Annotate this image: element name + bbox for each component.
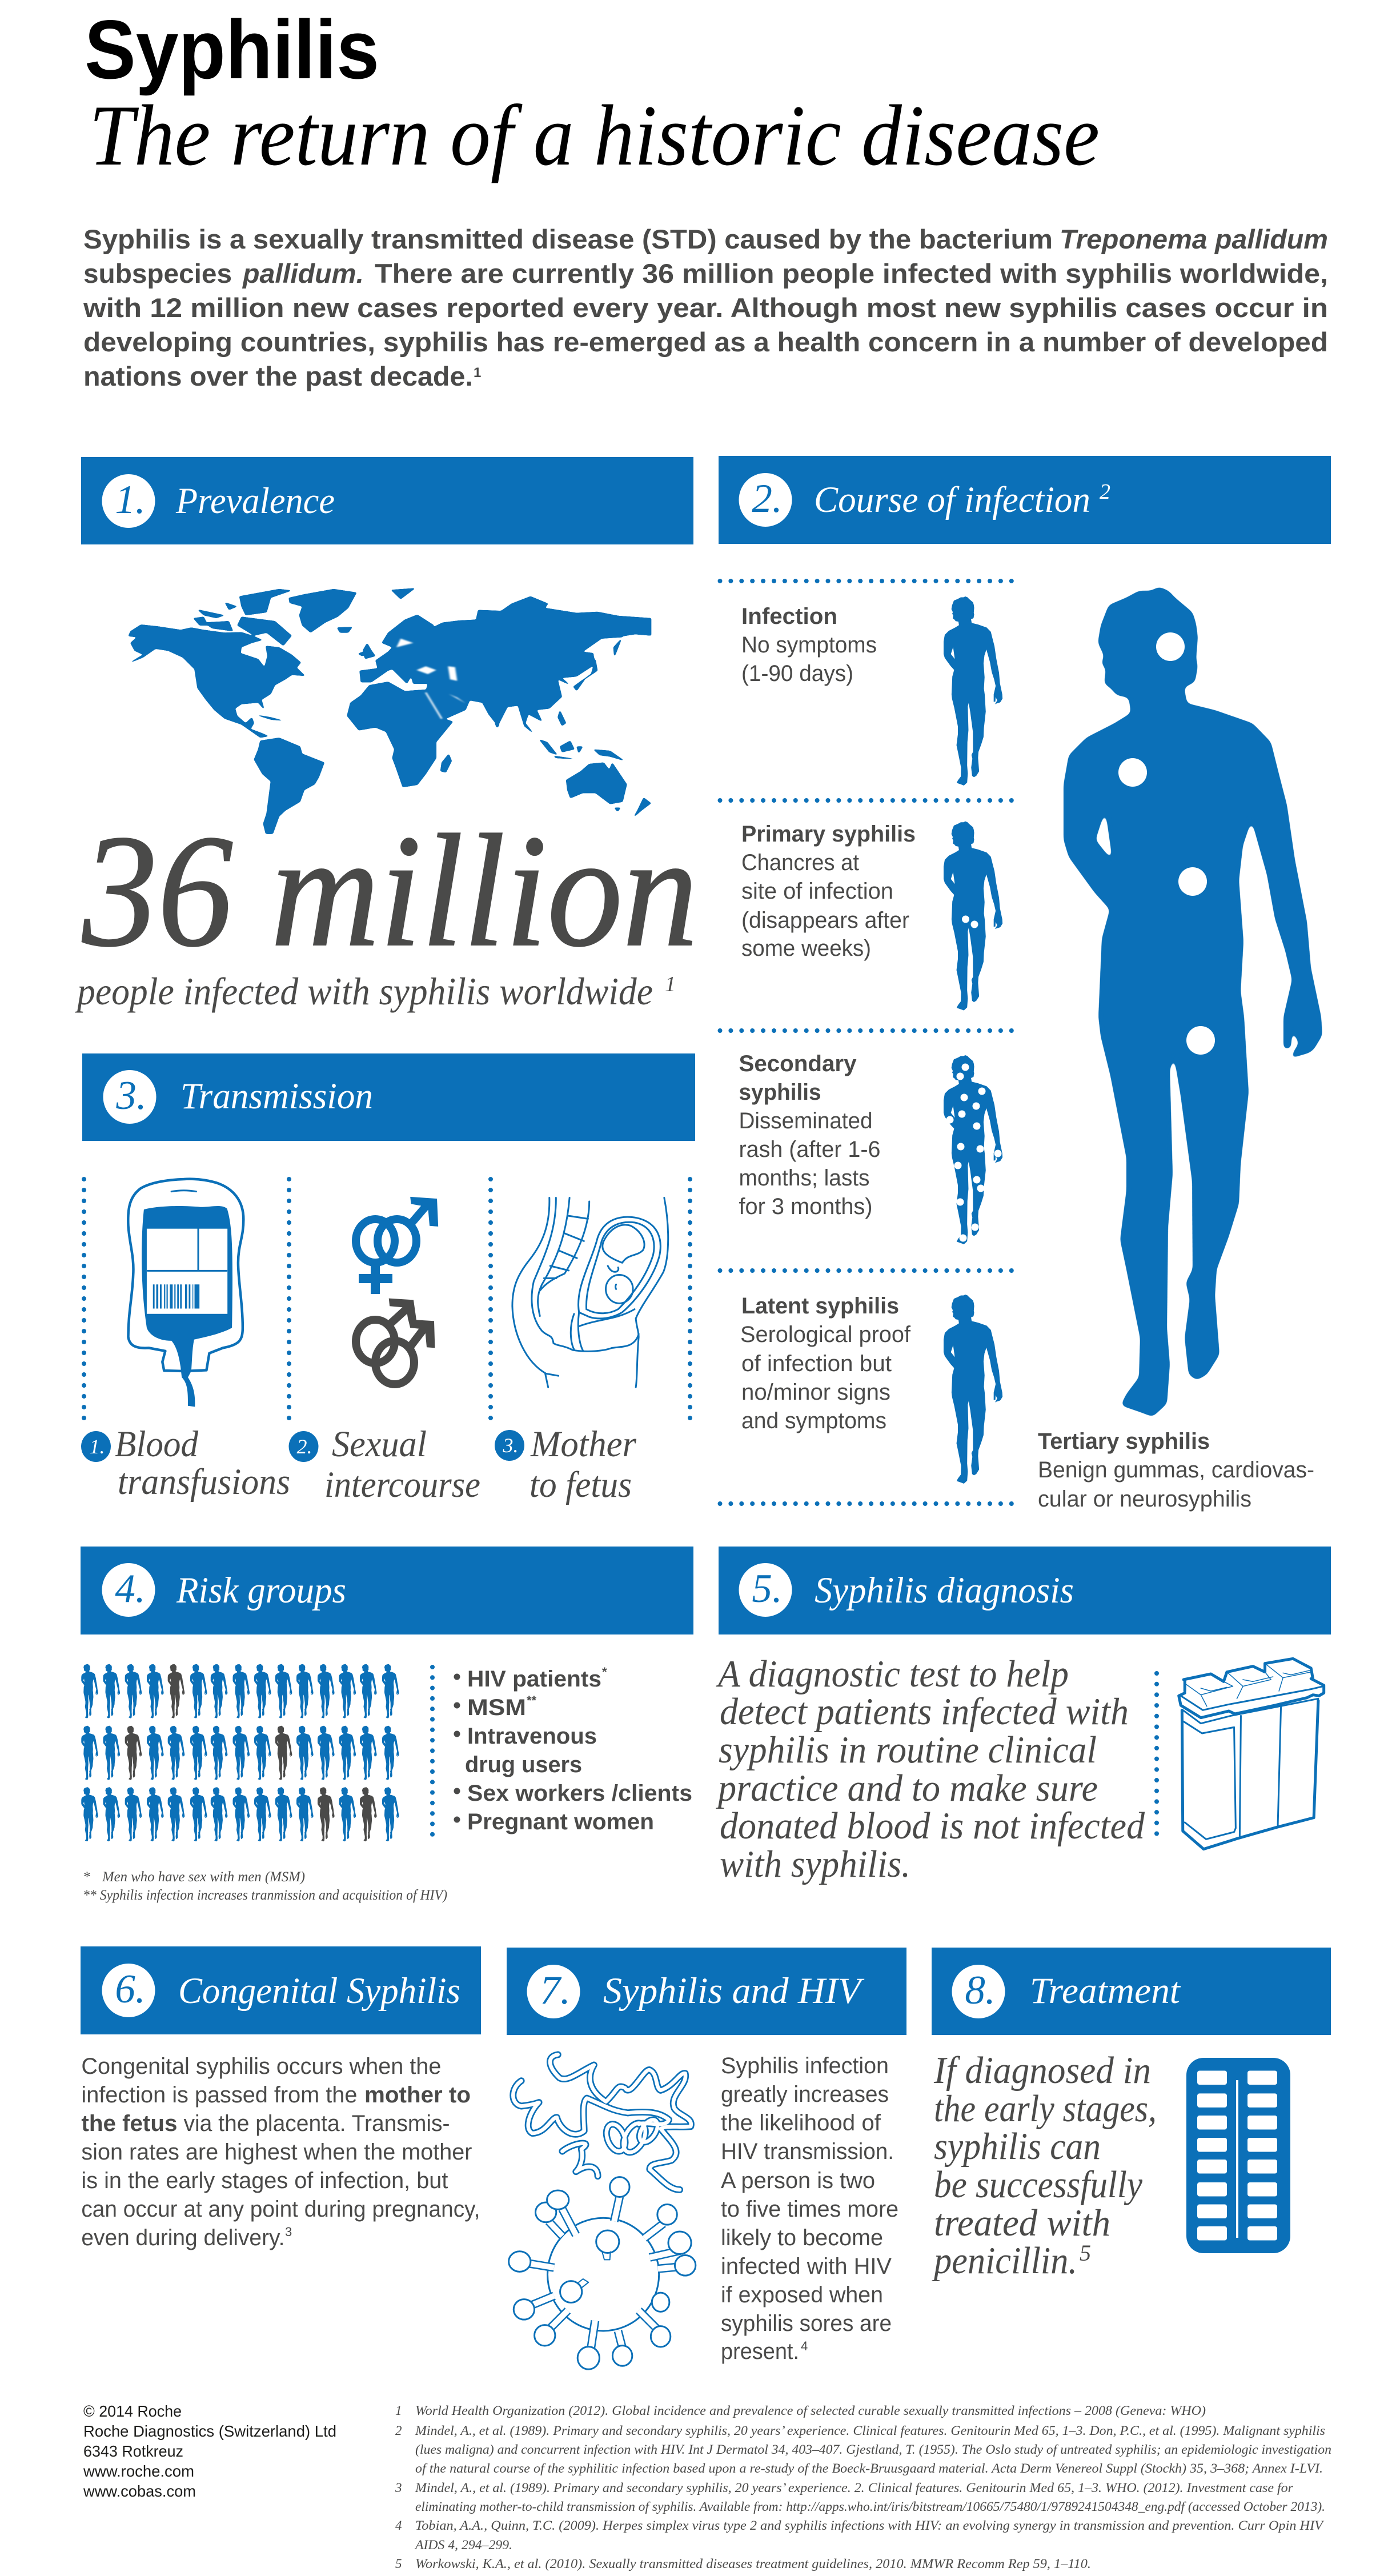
congenital syphilis text: 3 (285, 2225, 292, 2239)
congenital syphilis text: Congenital syphilis occurs when the (81, 2054, 441, 2079)
congenital syphilis text: can occur at any point during pregnancy, (81, 2197, 480, 2222)
divider: diagnosis (1154, 1673, 1159, 1844)
stage: latent syphilis text: no/minor signs (741, 1380, 890, 1405)
risk group footnotes (83, 1869, 447, 1903)
footer: references: Workowski, K.A., et al. (2010). Sexually transmitted diseases treatment guidelines, 2010. MMWR Recomm Rep 59, 1–110. (415, 2557, 1091, 2571)
header 5: syphilis diagnosis: Syphilis diagnosis (815, 1570, 1074, 1611)
risk groups list: Sex workers /clients (467, 1781, 692, 1806)
stage: primary syphilis text (741, 822, 916, 961)
header 1: prevalence: Prevalence (175, 480, 335, 522)
header 7: syphilis and HIV: 7. (540, 1968, 571, 2013)
stage: secondary syphilis text: rash (after 1-6 (739, 1137, 881, 1162)
stage: primary syphilis text: (disappears after (741, 908, 909, 933)
icon: figure primary syphilis (944, 822, 1002, 1011)
risk groups list: HIV patients (467, 1666, 601, 1692)
stage: secondary syphilis text: for 3 months) (739, 1194, 873, 1219)
footer: address (83, 2402, 336, 2500)
diagnosis text: with syphilis. (720, 1843, 910, 1885)
icon: penicillin blister pack (1186, 2058, 1290, 2253)
congenital syphilis text (81, 2054, 480, 2250)
HIV text: 4 (801, 2339, 808, 2353)
icon: spirochete bacterium (513, 2054, 691, 2190)
diagnosis text (716, 1653, 1145, 1885)
HIV text: if exposed when (721, 2282, 883, 2307)
transmission label 3: Mother (530, 1424, 637, 1465)
treatment text: syphilis can (934, 2125, 1101, 2168)
footer: references: of the natural course of the syphilitic infection based upon a re-study of the Boeck-Bruusgaard material. Acta Derm Venereol Suppl (Stockh) 35, 3–368; Annex I-LVI. (415, 2461, 1323, 2475)
header 8: treatment: 8. (965, 1968, 996, 2013)
world map (127, 588, 651, 834)
header 7: syphilis and HIV: Syphilis and HIV (603, 1970, 864, 2012)
header 6: congenital syphilis: Congenital Syphilis (178, 1970, 460, 2012)
HIV text (721, 2053, 898, 2364)
header 3: transmission: Transmission (180, 1076, 373, 1117)
HIV text: syphilis sores are (721, 2311, 892, 2336)
stage: tertiary syphilis text: Tertiary syphilis (1038, 1429, 1210, 1454)
intro text: nations over the past decade. (83, 361, 473, 391)
icon: large figure tertiary syphilis (1064, 587, 1322, 1417)
risk groups list: ** (527, 1693, 537, 1708)
title (85, 3, 1100, 183)
header 5: syphilis diagnosis: 5. (752, 1567, 783, 1611)
header 1: prevalence: 1. (115, 478, 146, 522)
footer: address: www.roche.com (83, 2462, 194, 2480)
treatment text: be successfully (934, 2164, 1142, 2206)
header 2: course of infection: 2. (752, 476, 783, 521)
congenital syphilis text: via the placenta. Transmis- (184, 2111, 450, 2136)
stage: secondary syphilis text: Disseminated (739, 1108, 873, 1133)
icon: gender symbols (356, 1197, 438, 1384)
intro text: subspecies (83, 258, 232, 289)
stage: latent syphilis text (740, 1293, 911, 1433)
congenital syphilis text: mother to (364, 2082, 471, 2108)
stage: latent syphilis text: of infection but (741, 1351, 892, 1376)
stage: secondary syphilis text: syphilis (739, 1080, 821, 1105)
panel: transmission dividers (84, 1179, 690, 1419)
treatment text: treated with (934, 2202, 1110, 2244)
diagnosis text: detect patients infected with (720, 1690, 1129, 1733)
intro text (83, 224, 1328, 391)
risk groups list (454, 1665, 692, 1834)
stage: latent syphilis text: and symptoms (741, 1408, 886, 1433)
risk groups list: Pregnant women (467, 1809, 654, 1834)
stage: infection text: Infection (741, 604, 837, 629)
divider: risk list (430, 1667, 435, 1845)
transmission label 2: 2. (297, 1435, 312, 1458)
footer: references: 5 (395, 2557, 402, 2571)
footer: address: 6343 Rotkreuz (83, 2442, 183, 2460)
stage: infection text: (1-90 days) (741, 661, 853, 686)
diagnosis text: syphilis in routine clinical (719, 1729, 1097, 1771)
intro text: with 12 million new cases reported every year. Although most new syphilis cases occur in (83, 293, 1328, 323)
stage: primary syphilis text: site of infection (741, 879, 893, 904)
intro text: Syphilis is a sexually transmitted disease (STD) caused by the bacterium (83, 224, 1053, 254)
treatment text: If diagnosed in (933, 2049, 1151, 2092)
congenital syphilis text: infection is passed from the (81, 2082, 357, 2108)
footer: references: eliminating mother-to-child transmission of syphilis. Available from: http://apps.who.int/iris/bitstream/10665/75480/1/9789241504348_eng.pdf (accessed October 2013). (415, 2499, 1325, 2514)
footer: references: Mindel, A., et al. (1989). Primary and secondary syphilis, 20 years’ experience. 2. Clinical features. Genitourin Med 65, 1–3. WHO. (2012). Investment case for (415, 2481, 1294, 2495)
stage: latent syphilis text: Latent syphilis (741, 1293, 899, 1319)
header 6: congenital syphilis: 6. (115, 1967, 146, 2012)
transmission label 3 (495, 1424, 637, 1505)
footer: references: Tobian, A.A., Quinn, T.C. (2009). Herpes simplex virus type 2 and syphilis infections with HIV: an evolving synergy in transmission and prevention. Curr Opin HIV (415, 2518, 1325, 2533)
transmission label 3: 3. (503, 1434, 519, 1457)
risk groups list: Intravenous (467, 1724, 597, 1749)
header 3: transmission: 3. (115, 1073, 147, 1118)
stage: infection text (741, 604, 877, 686)
transmission label 2 (289, 1424, 480, 1505)
header 4: risk groups (81, 1547, 693, 1634)
header 8: treatment: Treatment (1030, 1970, 1181, 2012)
intro text: There are currently 36 million people infected with syphilis worldwide, (375, 258, 1328, 289)
HIV text: likely to become (721, 2225, 883, 2250)
stage: secondary syphilis text (739, 1051, 881, 1219)
HIV text: the likelihood of (721, 2110, 881, 2136)
stage: tertiary syphilis text: cular or neurosyphilis (1038, 1487, 1251, 1512)
HIV text: to five times more (721, 2197, 898, 2222)
risk groups list: * (602, 1665, 607, 1679)
icon: blood bag (128, 1179, 243, 1407)
header 5: syphilis diagnosis (719, 1547, 1331, 1634)
stage: secondary syphilis text: months; lasts (739, 1165, 869, 1191)
HIV text: HIV transmission. (721, 2139, 894, 2164)
HIV text: A person is two (721, 2168, 875, 2193)
intro text: developing countries, syphilis has re-emerged as a health concern in a number of developed (83, 327, 1328, 357)
transmission label 1: 1. (89, 1435, 105, 1458)
icon: figure latent syphilis (944, 1295, 1002, 1484)
header 8: treatment (932, 1948, 1331, 2035)
footer: references: World Health Organization (2012). Global incidence and prevalence of selected curable sexually transmitted infections – 2008 (Geneva: WHO) (415, 2403, 1206, 2418)
risk group footnotes: Men who have sex with men (MSM) (102, 1869, 305, 1885)
footer: references: 3 (395, 2481, 402, 2495)
transmission label 1 (81, 1424, 290, 1503)
stage: primary syphilis text: Chancres at (741, 850, 859, 875)
icon: HIV virus (509, 2177, 696, 2369)
pictogram: people at risk (81, 1664, 399, 1841)
intro text: pallidum. (242, 258, 364, 289)
congenital syphilis text: even during delivery. (81, 2225, 284, 2250)
prevalence caption: people infected with syphilis worldwide (75, 969, 653, 1013)
footer: address: Roche Diagnostics (Switzerland) Ltd (83, 2422, 336, 2440)
congenital syphilis text: the fetus (81, 2111, 177, 2136)
footer: address: © 2014 Roche (83, 2402, 182, 2420)
prevalence caption: 1 (665, 972, 676, 996)
diagnosis text: practice and to make sure (716, 1767, 1098, 1809)
HIV text: present. (721, 2339, 799, 2364)
treatment text (932, 2049, 1157, 2282)
stage: primary syphilis text: Primary syphilis (741, 822, 916, 847)
header 7: syphilis and HIV (507, 1948, 906, 2035)
risk groups list: MSM (467, 1695, 526, 1720)
header 6: congenital syphilis (81, 1946, 481, 2034)
diagnosis text: A diagnostic test to help (716, 1653, 1069, 1695)
header 3: transmission (82, 1053, 695, 1141)
stage: tertiary syphilis text (1038, 1429, 1314, 1512)
treatment text: the early stages, (934, 2088, 1157, 2130)
congenital syphilis text: is in the early stages of infection, but (81, 2168, 448, 2193)
intro text: Treponema pallidum (1060, 224, 1328, 254)
footer: references: AIDS 4, 294–299. (414, 2538, 512, 2552)
panel: infection stage dividers (720, 581, 1012, 1504)
stage: secondary syphilis text: Secondary (739, 1051, 857, 1076)
stage: latent syphilis text: Serological proof (740, 1322, 911, 1347)
footer: references: Mindel, A., et al. (1989). Primary and secondary syphilis, 20 years’ experience. Clinical features. Genitourin Med 65, 1–3. Don, P.C., et al. (1995). Malignant syphilis (415, 2423, 1325, 2438)
header 1: prevalence (81, 457, 693, 544)
header 2: course of infection: Course of infection (814, 479, 1090, 520)
congenital syphilis text: sion rates are highest when the mother (81, 2140, 472, 2165)
risk groups list: drug users (465, 1752, 582, 1777)
big number: 36 million (80, 802, 698, 980)
transmission label 1: Blood (115, 1424, 198, 1465)
stage: infection text: No symptoms (741, 632, 877, 658)
title: Syphilis (85, 3, 379, 96)
intro text: 1 (474, 365, 481, 380)
risk group footnotes: ** Syphilis infection increases tranmission and acquisition of HIV) (83, 1888, 447, 1903)
transmission label 1: transfusions (118, 1461, 290, 1503)
header 4: risk groups: 4. (115, 1567, 146, 1611)
transmission label 3: to fetus (529, 1464, 632, 1505)
stage: tertiary syphilis text: Benign gummas, cardiovas- (1038, 1457, 1314, 1483)
treatment text: penicillin. (932, 2240, 1077, 2282)
icon: test cartridge (1179, 1658, 1324, 1849)
HIV text: infected with HIV (721, 2254, 892, 2279)
footer: address: www.cobas.com (83, 2482, 196, 2500)
risk group footnotes: * (83, 1869, 90, 1885)
title: The return of a historic disease (89, 87, 1100, 183)
icon: figure secondary syphilis (944, 1055, 1002, 1244)
transmission label 2: intercourse (324, 1464, 480, 1505)
icon: figure infection (944, 596, 1002, 786)
header 2: course of infection (719, 456, 1331, 544)
icon: pregnant woman (512, 1197, 668, 1387)
HIV text: Syphilis infection (721, 2053, 889, 2078)
stage: primary syphilis text: some weeks) (741, 936, 871, 961)
header 4: risk groups: Risk groups (176, 1570, 346, 1611)
diagnosis text: donated blood is not infected (720, 1805, 1145, 1847)
header 2: course of infection: 2 (1100, 480, 1110, 504)
treatment text: 5 (1080, 2240, 1091, 2266)
HIV text: greatly increases (721, 2082, 889, 2107)
transmission label 2: Sexual (332, 1424, 427, 1465)
footer: references: 1 (395, 2403, 402, 2418)
footer: references: 2 (395, 2423, 402, 2438)
footer: references: 4 (395, 2518, 402, 2533)
footer: references: (lues maligna) and concurrent infection with HIV. Int J Dermatol 34, 403–407. Gjestland, T. (1955). The Oslo study of untreated syphilis; an epidemiologic investigation (415, 2442, 1331, 2457)
footer: references (395, 2403, 1331, 2571)
